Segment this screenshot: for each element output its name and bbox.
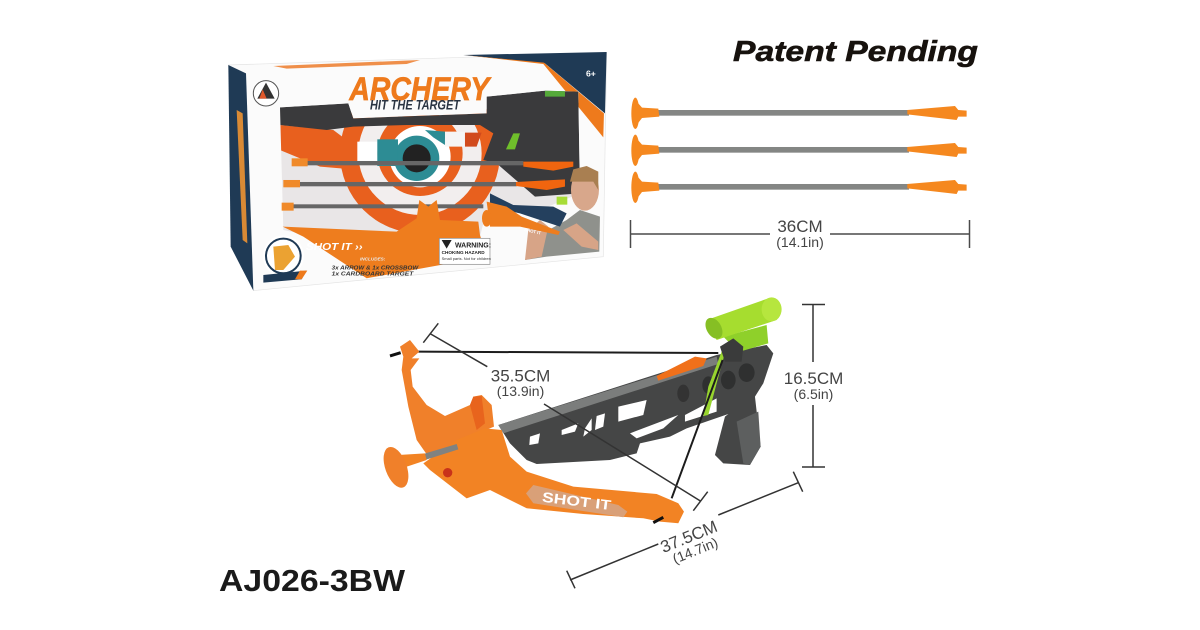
man with crossbow: SHOT IT bbox=[524, 227, 542, 236]
product box: 6+ bbox=[586, 69, 596, 79]
crossbow on box: SHOT IT ›› bbox=[306, 242, 363, 253]
scope bbox=[702, 297, 782, 351]
dimension: crossbow depth: 37.5CM bbox=[658, 517, 720, 557]
includes text bbox=[332, 257, 419, 277]
badge bbox=[263, 235, 307, 283]
dimension: crossbow depth bbox=[567, 472, 803, 588]
green trigger bbox=[703, 347, 727, 416]
dimension: arrow length bbox=[630, 217, 970, 250]
box window with crossbow and target bbox=[280, 90, 580, 236]
man with crossbow bbox=[482, 166, 600, 260]
model number: AJ026-3BW bbox=[219, 563, 406, 598]
warning label: WARNING: bbox=[455, 243, 491, 250]
dimension: crossbow height bbox=[784, 304, 843, 467]
crossbow bbox=[379, 297, 782, 523]
includes text: INCLUDES: bbox=[360, 257, 386, 262]
dimension: crossbow width bbox=[423, 323, 708, 511]
box corner band bbox=[463, 52, 607, 113]
dimension: crossbow height: 16.5CM bbox=[784, 369, 843, 388]
lower bow limb bbox=[423, 428, 684, 523]
arrow 2 bbox=[631, 135, 967, 166]
dimension: crossbow height: (6.5in) bbox=[794, 386, 833, 402]
crossbow on box bbox=[283, 200, 487, 278]
crossbow stock bbox=[498, 345, 773, 465]
arrow 1 bbox=[631, 98, 967, 129]
warning label: CHOKING HAZARD bbox=[442, 250, 485, 255]
warning label bbox=[439, 238, 491, 264]
dimension: arrow length: (14.1in) bbox=[776, 234, 824, 250]
includes text: 1x CARDBOARD TARGET bbox=[332, 271, 414, 277]
title: patent pending: Patent Pending bbox=[733, 36, 978, 68]
string nocks bbox=[390, 353, 663, 523]
top flap title bbox=[273, 60, 420, 69]
includes text: 3x ARROW & 1x CROSSBOW bbox=[332, 265, 419, 271]
product infographic canvas bbox=[220, 40, 978, 592]
product box bbox=[228, 52, 607, 291]
brand logo bbox=[253, 81, 279, 106]
arrow 3 bbox=[631, 172, 967, 203]
box title: ARCHERY bbox=[348, 71, 492, 107]
label: shot it bbox=[526, 485, 627, 517]
trigger housing bbox=[720, 338, 743, 362]
box title: HIT THE TARGET bbox=[370, 96, 461, 112]
label: shot it: SHOT IT bbox=[541, 489, 613, 513]
box arrows bbox=[282, 158, 573, 211]
suction arrow bbox=[379, 444, 458, 491]
dimension: crossbow depth: (14.7in) bbox=[670, 534, 720, 567]
box side panel bbox=[228, 65, 253, 291]
dimension: crossbow width: (13.9in) bbox=[497, 383, 544, 399]
arrows panel bbox=[631, 98, 967, 203]
upper bow limb bbox=[400, 340, 494, 457]
warning label: Small parts. Not for children bbox=[442, 256, 491, 261]
dimension: arrow length: 36CM bbox=[777, 217, 823, 236]
loaded arrow fletch bbox=[657, 357, 707, 381]
bow string bbox=[418, 352, 723, 498]
dimension: crossbow width: 35.5CM bbox=[491, 366, 550, 386]
